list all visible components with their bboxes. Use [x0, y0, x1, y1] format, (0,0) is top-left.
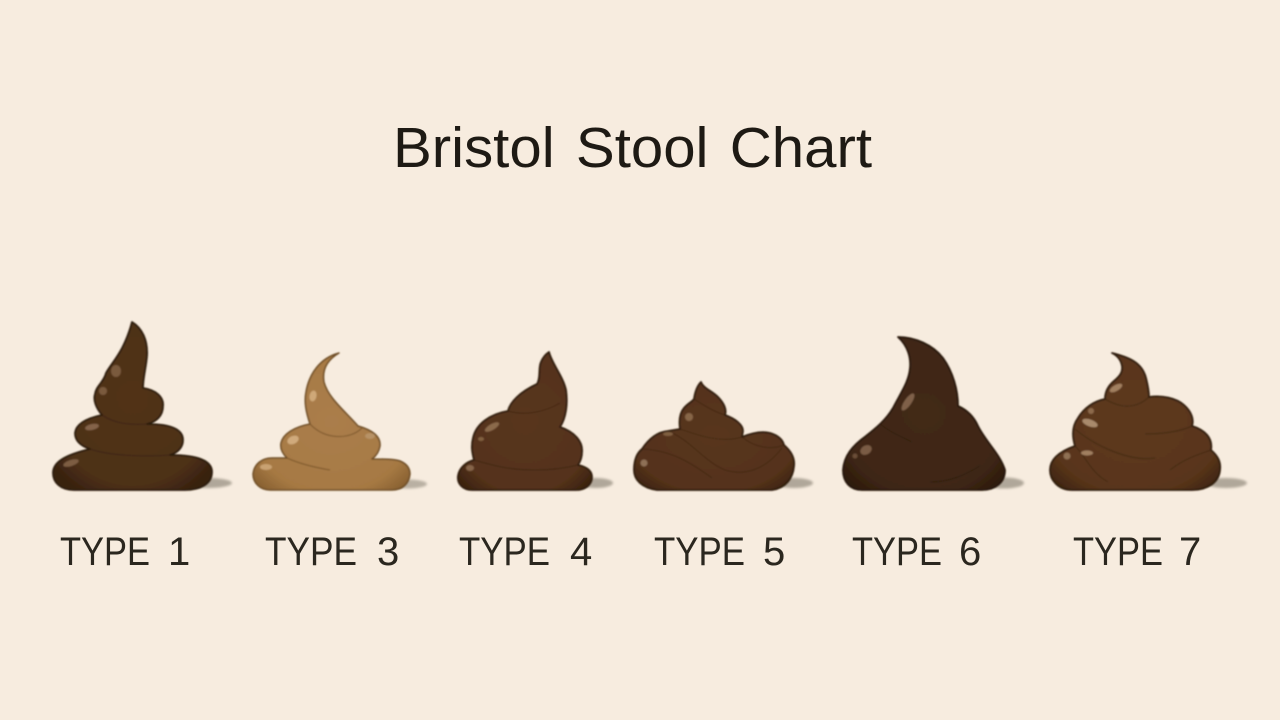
type 4 group — [458, 352, 613, 574]
type 7 label: TYPE — [1073, 530, 1163, 574]
type 3 stool — [253, 353, 410, 490]
type 4 label: 4 — [570, 530, 592, 574]
type 7 shadow — [1205, 478, 1247, 488]
type 5 label: 5 — [763, 530, 785, 574]
title: Bristol Stool Chart — [393, 116, 872, 180]
type 6 group — [843, 337, 1024, 574]
type 7 stool — [1050, 353, 1220, 490]
type 3 label: TYPE — [265, 530, 357, 574]
type 1 label: TYPE — [60, 530, 150, 574]
type 5 stool — [634, 382, 794, 490]
type 6 label: 6 — [959, 530, 981, 574]
type 5 shadow — [775, 478, 813, 488]
type 6 label: TYPE — [852, 530, 942, 574]
type 7 group — [1050, 353, 1247, 574]
type 1 shadow — [184, 478, 232, 488]
type 1 stool — [53, 322, 212, 490]
type 4 label: TYPE — [459, 530, 550, 574]
type 6 stool — [843, 337, 1005, 490]
type 3 label: 3 — [377, 530, 399, 574]
type 1 label: 1 — [168, 530, 190, 574]
type 3 group — [253, 353, 427, 574]
type 4 stool — [458, 352, 592, 490]
type 5 group — [634, 382, 813, 574]
type 6 shadow — [984, 478, 1024, 488]
type 7 label: 7 — [1179, 530, 1201, 574]
type 4 shadow — [579, 478, 613, 488]
type 5 label: TYPE — [654, 530, 745, 574]
type 1 group — [53, 322, 232, 574]
type 3 shadow — [389, 480, 427, 488]
